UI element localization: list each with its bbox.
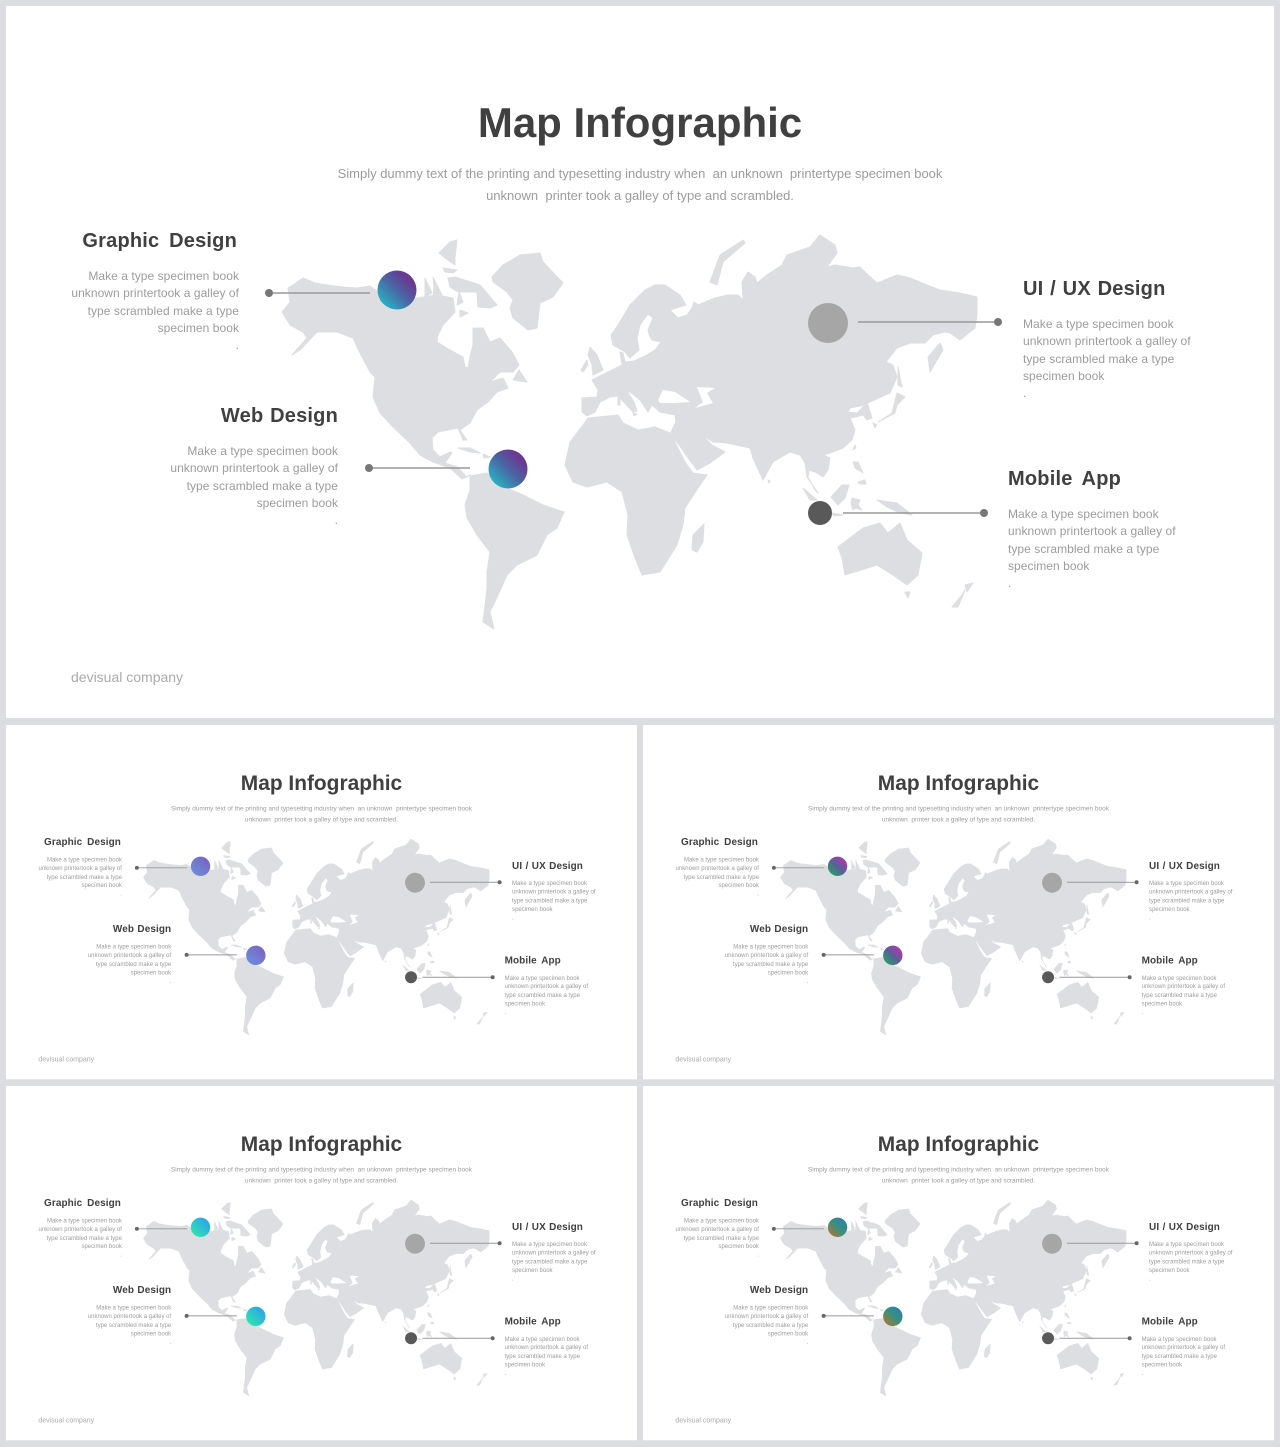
marker: UI / UX Design xyxy=(1042,873,1139,893)
world map xyxy=(143,1200,489,1396)
callout: UI / UX Design: UI / UX Design xyxy=(1149,1221,1220,1232)
callout: Graphic Design: Graphic Design xyxy=(681,836,758,847)
callout: Graphic Design: Make a type specimen book unknown printertook a galley of type scrambled make a type specimen book . xyxy=(676,856,759,897)
panel: variant purple xyxy=(6,725,637,1079)
footer: devisual company xyxy=(675,1055,731,1063)
marker: Web Design xyxy=(822,1307,902,1326)
map with markers xyxy=(265,234,1002,630)
callout: UI / UX Design: UI / UX Design xyxy=(512,1221,583,1232)
callout: Mobile App: Mobile App xyxy=(1008,468,1121,490)
map with markers xyxy=(134,1200,502,1396)
title: Map Infographic xyxy=(878,1132,1039,1156)
marker: Graphic Design xyxy=(265,270,416,310)
marker: UI / UX Design xyxy=(405,873,502,893)
marker: Web Design xyxy=(185,1307,265,1326)
panel: variant cyan xyxy=(6,1086,637,1440)
marker: Graphic Design xyxy=(135,1218,210,1237)
world map xyxy=(282,235,977,629)
callout: Web Design: Web Design xyxy=(750,924,808,934)
world map xyxy=(143,839,489,1035)
title: Map Infographic xyxy=(878,771,1039,795)
marker: Mobile App xyxy=(1042,1332,1132,1344)
panel: variant teal brown xyxy=(643,1086,1274,1440)
callout: Mobile App: Make a type specimen book unknown printertook a galley of type scrambled make a type specimen book . xyxy=(1008,507,1176,590)
callout: Web Design: Web Design xyxy=(221,405,338,427)
marker: Web Design xyxy=(365,450,528,488)
footer: devisual company xyxy=(38,1055,94,1063)
marker: Mobile App xyxy=(808,501,988,525)
callout: Web Design: Make a type specimen book unknown printertook a galley of type scrambled make a type specimen book . xyxy=(725,1304,808,1345)
callout: Mobile App xyxy=(1142,1316,1225,1377)
title: Map Infographic xyxy=(478,99,802,146)
footer: devisual company xyxy=(675,1416,731,1424)
callout: UI / UX Design xyxy=(1023,278,1191,400)
callout: Web Design: Make a type specimen book unknown printertook a galley of type scrambled make a type specimen book . xyxy=(88,943,171,984)
callout: Mobile App: Mobile App xyxy=(505,955,561,966)
callout: Graphic Design: Make a type specimen book unknown printertook a galley of type scrambled make a type specimen book . xyxy=(676,1217,759,1258)
subtitle: Simply dummy text of the printing and typesetting industry when an unknown printertype specimen book unknown printer took a galley of type and scrambled. xyxy=(808,1166,1109,1184)
callout: Web Design: Web Design xyxy=(113,924,171,934)
callout: Graphic Design xyxy=(38,1197,122,1258)
marker: Mobile App xyxy=(405,1332,495,1344)
callout: Web Design xyxy=(88,1285,172,1345)
subtitle: Simply dummy text of the printing and typesetting industry when an unknown printertype specimen book unknown printer took a galley of type and scrambled. xyxy=(808,805,1109,823)
subtitle: Simply dummy text of the printing and typesetting industry when an unknown printertype specimen book unknown printer took a galley of type and scrambled. xyxy=(338,166,942,203)
callout: Mobile App: Make a type specimen book unknown printertook a galley of type scrambled make a type specimen book . xyxy=(1142,1335,1225,1377)
callout: Web Design: Web Design xyxy=(113,1285,171,1295)
callout: Mobile App xyxy=(1142,955,1225,1016)
callout: Graphic Design: Make a type specimen book unknown printertook a galley of type scrambled make a type specimen book . xyxy=(39,1217,122,1258)
callout: UI / UX Design: Make a type specimen book unknown printertook a galley of type scrambled make a type specimen book . xyxy=(1149,880,1232,921)
title: Map Infographic xyxy=(241,1132,402,1156)
callout: Web Design xyxy=(725,924,808,984)
panel: main slide xyxy=(6,6,1274,718)
callout: Mobile App: Make a type specimen book unknown printertook a galley of type scrambled make a type specimen book . xyxy=(1142,974,1225,1016)
callout: Web Design: Make a type specimen book unknown printertook a galley of type scrambled make a type specimen book . xyxy=(725,943,808,984)
world map xyxy=(780,1200,1126,1396)
callout: UI / UX Design: Make a type specimen book unknown printertook a galley of type scrambled make a type specimen book . xyxy=(1023,317,1191,400)
marker: Graphic Design xyxy=(772,1218,847,1237)
map with markers xyxy=(134,838,502,1036)
callout: Graphic Design xyxy=(71,230,239,352)
marker: Graphic Design xyxy=(772,857,847,876)
callout: Graphic Design: Make a type specimen book unknown printertook a galley of type scrambled make a type specimen book . xyxy=(39,856,122,897)
callout: Graphic Design: Graphic Design xyxy=(82,230,237,252)
callout: UI / UX Design: Make a type specimen book unknown printertook a galley of type scrambled make a type specimen book . xyxy=(1149,1241,1232,1282)
callout: Web Design: Web Design xyxy=(750,1285,808,1295)
callout: UI / UX Design xyxy=(1149,860,1232,921)
map with markers xyxy=(772,838,1139,1036)
callout: Graphic Design: Graphic Design xyxy=(44,1197,121,1208)
callout: Graphic Design: Graphic Design xyxy=(681,1197,758,1208)
callout: UI / UX Design: UI / UX Design xyxy=(1023,278,1166,300)
callout: Mobile App: Mobile App xyxy=(505,1316,561,1327)
marker: UI / UX Design xyxy=(405,1234,502,1254)
callout: Web Design: Make a type specimen book unknown printertook a galley of type scrambled make a type specimen book . xyxy=(88,1304,171,1345)
marker: Mobile App xyxy=(405,971,495,983)
callout: Web Design xyxy=(725,1285,808,1345)
callout: Web Design xyxy=(170,405,338,527)
callout: Web Design xyxy=(88,924,172,984)
callout: UI / UX Design: Make a type specimen book unknown printertook a galley of type scrambled make a type specimen book . xyxy=(512,1241,595,1282)
callout: Mobile App: Make a type specimen book unknown printertook a galley of type scrambled make a type specimen book . xyxy=(505,974,588,1016)
title: Map Infographic xyxy=(241,771,402,795)
callout: UI / UX Design xyxy=(1149,1221,1232,1282)
marker: Web Design xyxy=(822,946,902,965)
footer: devisual company xyxy=(38,1416,94,1424)
callout: Graphic Design xyxy=(676,1197,759,1258)
marker: Mobile App xyxy=(1042,971,1132,983)
callout: Graphic Design: Graphic Design xyxy=(44,836,121,847)
callout: UI / UX Design: UI / UX Design xyxy=(1149,860,1220,871)
world map xyxy=(780,839,1126,1035)
callout: Mobile App xyxy=(504,955,588,1016)
marker: UI / UX Design xyxy=(808,303,1002,343)
callout: Mobile App: Mobile App xyxy=(1142,1316,1198,1327)
callout: UI / UX Design xyxy=(512,860,596,921)
marker: UI / UX Design xyxy=(1042,1234,1139,1254)
marker: Web Design xyxy=(185,946,265,965)
subtitle: Simply dummy text of the printing and typesetting industry when an unknown printertype specimen book unknown printer took a galley of type and scrambled. xyxy=(171,805,472,823)
callout: Mobile App: Make a type specimen book unknown printertook a galley of type scrambled make a type specimen book . xyxy=(505,1335,588,1377)
callout: UI / UX Design: Make a type specimen book unknown printertook a galley of type scrambled make a type specimen book . xyxy=(512,880,595,921)
callout: Graphic Design: Make a type specimen book unknown printertook a galley of type scrambled make a type specimen book . xyxy=(71,269,239,352)
callout: Graphic Design xyxy=(38,836,122,897)
map with markers xyxy=(772,1200,1139,1396)
callout: Mobile App xyxy=(504,1316,588,1377)
callout: Web Design: Make a type specimen book unknown printertook a galley of type scrambled make a type specimen book . xyxy=(170,444,338,527)
marker: Graphic Design xyxy=(135,857,210,876)
callout: Graphic Design xyxy=(676,836,759,897)
panel: variant magenta green xyxy=(643,725,1274,1079)
callout: UI / UX Design: UI / UX Design xyxy=(512,860,583,871)
callout: Mobile App: Mobile App xyxy=(1142,955,1198,966)
footer: devisual company xyxy=(71,669,183,685)
subtitle: Simply dummy text of the printing and typesetting industry when an unknown printertype specimen book unknown printer took a galley of type and scrambled. xyxy=(171,1166,472,1184)
callout: UI / UX Design xyxy=(512,1221,596,1282)
callout: Mobile App xyxy=(1008,468,1176,590)
